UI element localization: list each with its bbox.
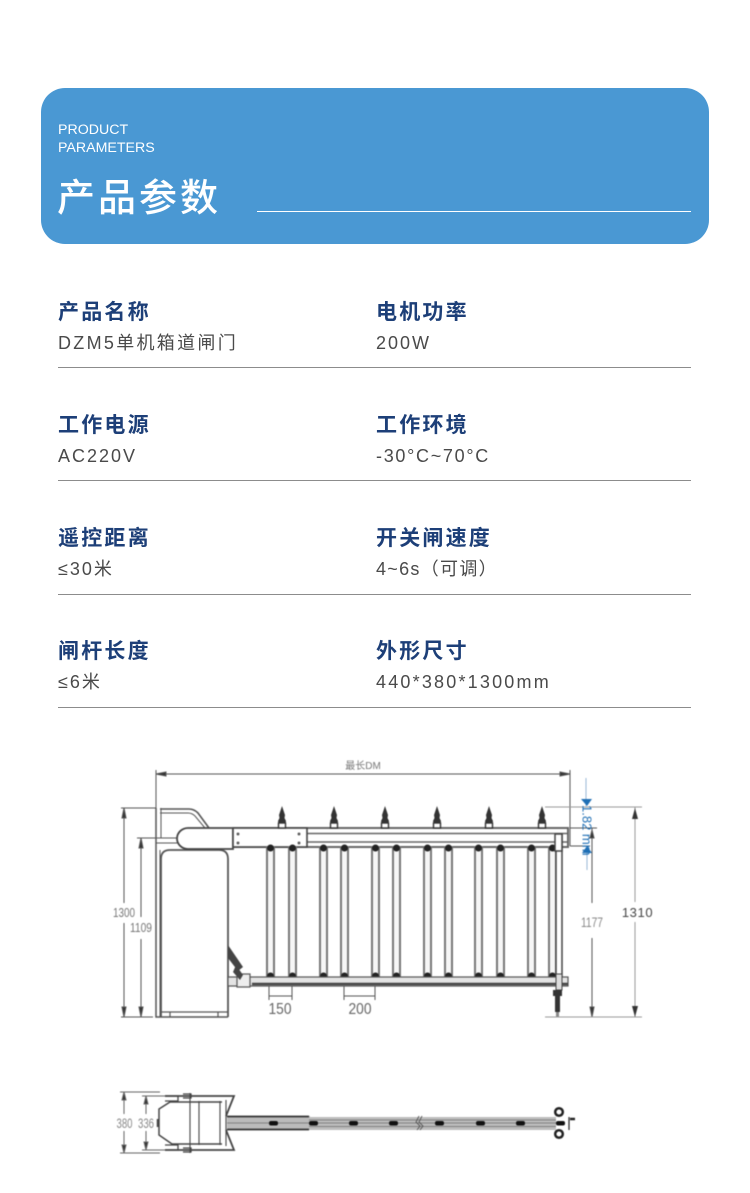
parameter: remote distance: ≤30米 bbox=[58, 559, 114, 579]
dimensions: 380 and 336: 380 bbox=[116, 1115, 133, 1131]
panel: header banner bbox=[41, 88, 709, 244]
parameter: dimensions bbox=[376, 640, 551, 692]
cabinet bbox=[156, 808, 228, 1017]
parameter: product name bbox=[58, 300, 238, 353]
parameter: remote distance: 遥控距离 bbox=[58, 527, 151, 550]
dimensions: picket spacing bbox=[268, 986, 375, 1018]
foot anchor bbox=[553, 974, 562, 1017]
dimension: height 1177: 1177 bbox=[581, 914, 603, 930]
top view drawing bbox=[116, 1092, 575, 1153]
arm end fittings bbox=[555, 1108, 575, 1138]
parameter: boom length: ≤6米 bbox=[58, 672, 102, 692]
cabinet plan bbox=[158, 1093, 234, 1153]
parameter: motor power: 200W bbox=[376, 333, 431, 353]
dimensions: 380 and 336 bbox=[116, 1092, 165, 1153]
break mark bbox=[416, 1116, 423, 1130]
parameter: motor power: 电机功率 bbox=[376, 301, 469, 324]
parameter: motor power bbox=[376, 300, 469, 353]
parameter: product name: DZM5单机箱道闸门 bbox=[58, 333, 238, 353]
parameter: gate speed: 4~6s（可调） bbox=[376, 559, 498, 579]
dimension: height 1300: 1109 bbox=[130, 920, 152, 935]
english subtitle bbox=[58, 122, 155, 156]
parameter: working environment: 工作环境 bbox=[376, 414, 469, 437]
front elevation drawing bbox=[112, 760, 653, 1018]
top rail bbox=[233, 828, 568, 847]
hinge bbox=[228, 945, 243, 980]
bottom rail bbox=[228, 974, 568, 987]
dimension: overall width bbox=[156, 760, 570, 1017]
dimension: height 1300 bbox=[112, 808, 156, 1017]
parameter: dimensions: 440*380*1300mm bbox=[376, 672, 551, 692]
end post bbox=[555, 834, 562, 977]
parameter: dimensions: 外形尺寸 bbox=[376, 640, 469, 663]
heading underline bbox=[257, 211, 691, 212]
parameter: power supply: 工作电源 bbox=[58, 414, 151, 437]
dimension: height 1300: 1300 bbox=[113, 905, 135, 920]
parameter: working environment: -30°C~70°C bbox=[376, 446, 490, 466]
dimension: height 1310: 1310 bbox=[622, 905, 653, 920]
parameter: boom length: 闸杆长度 bbox=[58, 640, 151, 663]
dimensions: picket spacing: 150 bbox=[268, 1001, 292, 1018]
parameter: gate speed: 开关闸速度 bbox=[376, 527, 492, 550]
spikes bbox=[278, 806, 546, 828]
heading: product parameters: 产品参数 bbox=[57, 178, 221, 220]
parameter: working environment bbox=[376, 414, 490, 466]
parameter: power supply: AC220V bbox=[58, 446, 137, 466]
dimension: blue 1.82 mm: 1.82 mm bbox=[580, 805, 594, 856]
dimension: overall width: 最长DM bbox=[345, 760, 381, 772]
dimensions: 380 and 336: 336 bbox=[138, 1115, 154, 1131]
dimension: blue 1.82 mm bbox=[580, 778, 594, 870]
parameter: product name: 产品名称 bbox=[58, 301, 151, 324]
pickets bbox=[267, 844, 556, 980]
hood bbox=[177, 828, 233, 849]
parameter: remote distance bbox=[58, 526, 151, 579]
picket markers bbox=[269, 1121, 565, 1126]
dimensions: picket spacing: 200 bbox=[348, 1001, 372, 1018]
parameter: boom length bbox=[58, 640, 151, 692]
barrier arm plan bbox=[227, 1116, 556, 1130]
dimension: height 1177 bbox=[548, 828, 603, 1017]
english subtitle: PRODUCT bbox=[58, 122, 128, 138]
parameter: power supply bbox=[58, 414, 151, 466]
english subtitle: PARAMETERS bbox=[58, 140, 155, 156]
dimension: height 1310 bbox=[545, 807, 653, 1017]
parameter: gate speed bbox=[376, 526, 498, 579]
